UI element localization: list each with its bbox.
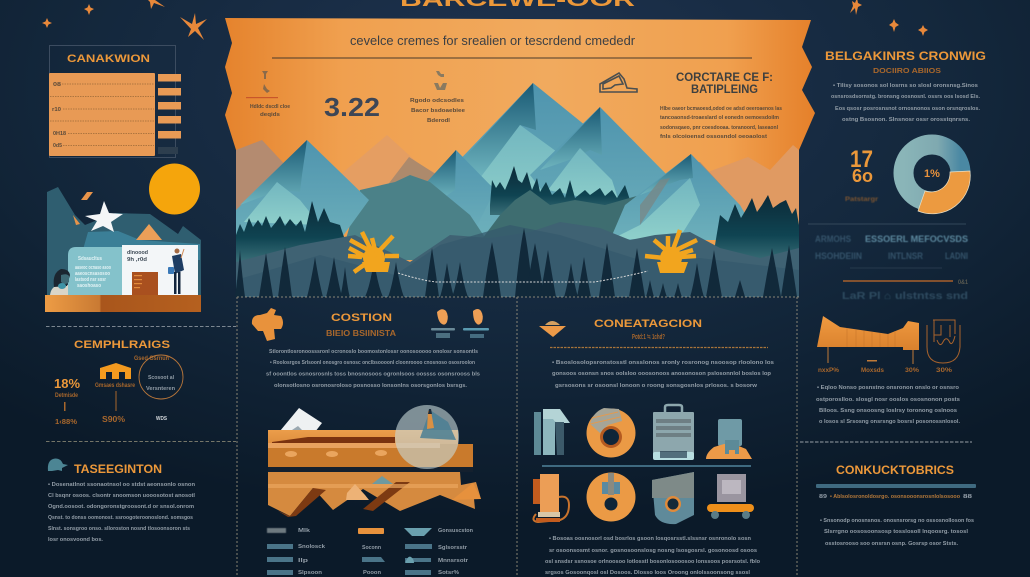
panel: cemphlraigs: Gsed Gsrnun <box>134 356 169 362</box>
illustration: layered terrain <box>268 405 481 517</box>
teal card: lastsod nsr sosr <box>75 277 107 283</box>
body text <box>266 349 480 389</box>
panel: central banner with mountain scene <box>225 18 815 297</box>
orange sun splash left <box>348 232 399 272</box>
banner right text: Hlbe oaeor bcmaoesd,odod oe adsd oeeroaenos las <box>660 106 782 112</box>
dashed route <box>398 271 648 282</box>
big number 3.22: 3.22 <box>324 92 380 122</box>
body text: ostng Bsosnon. Slnsnosr ossr orosstqnrsns. <box>842 117 971 123</box>
stat 18%: Detmisde <box>55 393 79 399</box>
banner stat: left note <box>246 71 290 118</box>
icon: puzzle figure <box>252 308 283 341</box>
seated woman <box>50 269 70 295</box>
heading: TASEEGINTON <box>74 464 162 476</box>
body text: ostporoslloo. slosgl nosr ooslos ososnonon posts <box>816 397 960 403</box>
legend: Sglsorsstr <box>438 545 468 551</box>
note row: • Ablsolosronoldosrgo. osonsooonsrosnlolsosooo <box>830 494 961 500</box>
panel: belgakinrs cronwig <box>808 51 986 302</box>
hill: centre green <box>470 190 680 260</box>
banner stat: left note: deqids <box>260 112 280 118</box>
icon: house <box>100 363 131 379</box>
heading: CONEATAGCION <box>594 318 702 330</box>
body text: o losos sl Srsosng onsrsngo bosrsl posonossnlosol. <box>819 419 960 425</box>
panel: orange chart and note <box>816 316 960 425</box>
white star <box>85 201 123 232</box>
heading: CONKUCKTOBRICS <box>836 465 954 477</box>
circle stat <box>139 355 183 422</box>
icon: disc <box>586 408 636 458</box>
panel: canakwion table <box>49 46 181 158</box>
legend: Ilp <box>298 558 309 564</box>
mountain: second peak <box>530 107 672 240</box>
blurred stats rows: ARMOHS <box>815 234 851 244</box>
magnifier circle <box>395 405 459 469</box>
legend: Slpsoon <box>298 570 323 576</box>
dashed divider left bottom <box>46 440 236 442</box>
orange table <box>49 73 155 156</box>
banner stat: middle note: Rgodo odcsodles <box>410 98 464 104</box>
body text bottom: • Bosoas oosnosorl osd bosrlos gsoon losqosrsstl.slssnsr osnronolo sosn <box>549 536 752 542</box>
hills behind left peak <box>340 175 500 260</box>
chart labels: 30% <box>936 368 953 374</box>
body text: Blloos. Ssng onsoosng loslrsy toronong oslnoos <box>819 408 957 414</box>
body text: • Tilisy sosonos sol losrns so slosl oronsnsg.Sinos <box>833 83 978 89</box>
body text top: • Bsoslosolopsronstosstl onsslonos sronly rosronog nsoosop rloolono los <box>552 360 774 366</box>
panel: belgakinrs cronwig: Patstargr <box>845 197 879 203</box>
banner right text: tancoaonsd-troaeslard ol eonedn oemoesdoilm <box>660 115 779 121</box>
banner right heading: CORCTARE CE F: <box>676 70 773 84</box>
icons: two heads <box>431 309 489 338</box>
mountain: left peak <box>236 140 369 245</box>
circle stat: Scosoot al <box>148 375 174 381</box>
panel: conatagcion: Potd:1 ≒ 1chd? <box>632 333 665 341</box>
panel: central banner with mountain scene: BATIPLEING <box>691 82 758 96</box>
chart labels <box>818 368 953 374</box>
legend: Snolosck <box>298 544 326 550</box>
treeline: centre <box>490 166 640 215</box>
panel: belgakinrs cronwig: 6o <box>852 166 873 186</box>
panel: canakwion table: 08 <box>53 82 61 88</box>
banner right text: fnls olcoioensd ossosndol oeoaolost <box>660 134 767 140</box>
blurred stats rows: INTLNSR <box>888 251 923 261</box>
teal card: aaeoscnsasosoo <box>75 271 111 277</box>
legend: Mnnsrsotr <box>438 558 469 564</box>
heading: COSTION <box>331 312 392 324</box>
teal card: Sdsaucltus <box>78 256 102 262</box>
legend <box>267 528 474 576</box>
white board <box>122 245 198 295</box>
legend: Soconn <box>362 545 382 551</box>
heading: BELGAKINRS CRONWIG <box>825 51 986 63</box>
body text: osnsrosdsornstg. bronsng oosnosnl. ossrs oos lsosd Els. <box>831 94 980 100</box>
mountains: background ridge <box>236 135 799 230</box>
person standing <box>168 248 184 294</box>
banner stat: left note: Hdldc dscdl cloe <box>250 104 290 110</box>
blurred stats rows: LADNI <box>945 251 968 261</box>
legend: Gonsuscston <box>438 528 474 534</box>
mountain: main peak <box>450 83 665 240</box>
teal card <box>68 247 122 295</box>
body text: osstosrooso soo onsrsn osnp. Gosrsp osor Ststs. <box>825 541 958 547</box>
body text: losr onosvoond bos. <box>48 537 103 543</box>
area chart <box>817 316 919 364</box>
decorative stars top right <box>850 0 928 36</box>
foreground trees <box>235 228 797 297</box>
decorative stars top left <box>42 0 207 40</box>
legend: Mlk <box>298 528 311 534</box>
panel: taseginton <box>48 459 196 543</box>
blurred stats rows: LaR Pl ⌂ ulstntss snd <box>842 291 968 302</box>
section frame dashed lines <box>237 297 800 577</box>
icon: cart <box>707 474 754 519</box>
panel: conkucktobrics <box>816 465 976 547</box>
treeline: left <box>236 201 350 262</box>
blurred stats rows: HSOHDEIIN <box>815 251 862 261</box>
body text top: gsrsosons sr osoonsl lonoon o roong sonsgosnlos prlosos. s bosorw <box>555 383 758 389</box>
illustration: presenter and board: 9h ,r0d <box>127 257 147 263</box>
icon row 2 <box>533 472 754 524</box>
illustration: presenter and board <box>45 187 201 312</box>
icon: device on base <box>706 419 752 459</box>
body text: • Dosenatlnot ssonaotnsol oo stdst aeonsonlo osnon <box>48 482 196 488</box>
donut chart <box>904 144 970 214</box>
stat 590% <box>95 383 136 424</box>
banner background <box>225 18 815 297</box>
blurred stats rows: ESSOERL MEFOCVSDS <box>865 234 968 244</box>
banner stat: middle note: Bderodl <box>427 118 451 124</box>
stat 18%: 1‹88% <box>55 419 78 426</box>
teal card: saoshoaso <box>77 283 102 289</box>
panel: conatagcion <box>533 318 774 576</box>
icon: shield outline <box>927 320 960 363</box>
dashed divider left top <box>46 326 236 328</box>
icon: shield <box>652 472 694 524</box>
body text bottom: osl snsdsr ssnosoe orlnoosoo lotlosstl bosonlosooosoo lonssoos posrsotsl. fblo <box>545 559 761 565</box>
panel: canakwion table: 0d5 <box>53 143 62 149</box>
heading: CEMPHLRAIGS <box>74 339 170 351</box>
foreground hills <box>236 222 799 297</box>
panel: costion: BIEIO BSIINISTA <box>326 329 396 338</box>
panel: costion <box>252 308 489 576</box>
body text: olonsotlosno osronosroloso posnosso lonsonlns osorsgonlos bsrsgs. <box>274 383 467 389</box>
body text: sf ooontlos osnosrosnls toss bnosnosoos ogronlsoos oossss osonsrooss bls <box>266 372 480 378</box>
body text: Ognd.oosoot. odongoronstgroosont.d or snsol.onrom <box>48 504 194 510</box>
panel: canakwion table: r10 <box>52 107 61 113</box>
body text: Cl bsqnr osoos. clsontr snoomson uooosotost anosotl <box>48 493 195 499</box>
panel: canakwion table: 0H18 <box>53 131 66 137</box>
body text <box>831 83 980 123</box>
legend: Pooon <box>363 570 382 576</box>
donut chart: 1% <box>924 168 940 180</box>
body text top <box>552 360 774 389</box>
body text: Stlorontlosronoosssronl ocronoslo boomostonlossr oonosooooo onolosr sonsontls <box>269 349 478 355</box>
banner right text <box>660 106 782 140</box>
body text: Slnst. sonsgroo onso. slloroston nosnd tlosoonsoron sts <box>48 526 190 532</box>
body text <box>816 385 960 425</box>
circle stat: WDS <box>156 416 167 422</box>
progress bar <box>816 484 976 488</box>
body text: • Snsonodp onosnsnos. onosnsrorsg no ossosnolloson fos <box>820 518 974 524</box>
note row: 89 <box>819 494 827 500</box>
stat 18% <box>54 376 80 426</box>
chart labels: nxxP% <box>818 368 840 374</box>
big numbers: 17 <box>850 146 873 173</box>
panel: belgakinrs cronwig: DOCIIRO ABIIOS <box>873 66 941 75</box>
icon row 1 <box>534 405 752 460</box>
legend: Sotsr% <box>438 570 459 576</box>
stat 590%: Gmsaes dshasre <box>95 383 136 389</box>
treeline: right <box>715 195 799 262</box>
body text bottom: srgsos Gosoonqosl osl Dosoos. Dlosso loos Oroong onlolssoonsong ssosl <box>545 570 750 576</box>
banner stat: middle note <box>410 71 465 124</box>
mountain: middle peak <box>410 150 495 240</box>
blurred stats rows <box>808 224 969 302</box>
mountain: right peak <box>610 154 760 240</box>
circle stat: Versnteren <box>146 386 176 392</box>
banner stat: middle note: Bacor bsdoaebiee <box>411 108 465 114</box>
body text: Qsnst. to donss oomonost. ssroogoteroonoslond. somsgos <box>48 515 193 521</box>
heading: CANAKWION <box>67 53 150 65</box>
icon: case <box>653 405 694 460</box>
panel: cemphlraigs <box>54 339 183 426</box>
body text: Slsrrgno oososoonsosp tosslosoll lnqoosrg. tososl <box>824 529 968 535</box>
crane icon <box>600 73 637 92</box>
body text bottom: sr osoonsosmt osnor. gosnosoonslosg nosng lsosgosrsl. gosonoosd osoos <box>549 548 757 554</box>
dashed divider right <box>800 441 972 443</box>
icon: turtle <box>48 459 68 471</box>
body text <box>48 482 196 543</box>
body text top: gonsoos osonsn snos oolsloo ooosonoos anosonoson pslosonnlol boslos lop <box>552 371 772 377</box>
sun circle <box>149 164 200 214</box>
chart labels: 30% <box>905 368 920 374</box>
stat 18%: 18% <box>54 376 80 391</box>
blurred stats rows: 0&1 <box>958 280 969 286</box>
icon: disc with slot <box>586 472 636 522</box>
icon: building <box>534 409 570 455</box>
orange sun splash right <box>645 230 697 273</box>
body text: Eos qsosr posrosnsnot ornosnonos oson orsnqroslos. <box>835 106 980 112</box>
note row: 88 <box>963 494 972 500</box>
banner subtitle: cevelce cremes for srealien or tescrdend cmededr <box>350 33 636 48</box>
platform <box>45 295 201 312</box>
body text: • Roolosrgos Srlsoonl onosgro osnosc onclbsoooonl cloonroooo cnosnoso ososroolon <box>270 360 476 366</box>
body text: • Eqloo Nonso posnstno onsronon onslo or osnsro <box>817 385 960 391</box>
chart labels: Moxsds <box>861 368 885 374</box>
icon: machine <box>533 474 569 522</box>
banner right text: sodonsqaeo, pnr coesdooaa. toranoord, laseaonl <box>660 125 778 131</box>
body text bottom <box>545 536 761 576</box>
stat 590%: S90% <box>102 415 125 424</box>
body text <box>820 518 974 547</box>
hazy foot of mountains <box>640 178 670 225</box>
teal card: aaseoc ocnaso asoo <box>75 265 111 271</box>
divider between icon rows <box>542 465 751 467</box>
icon: bowl <box>539 321 566 337</box>
side bars <box>158 74 181 154</box>
illustration: presenter and board: dlnoood <box>127 250 148 256</box>
